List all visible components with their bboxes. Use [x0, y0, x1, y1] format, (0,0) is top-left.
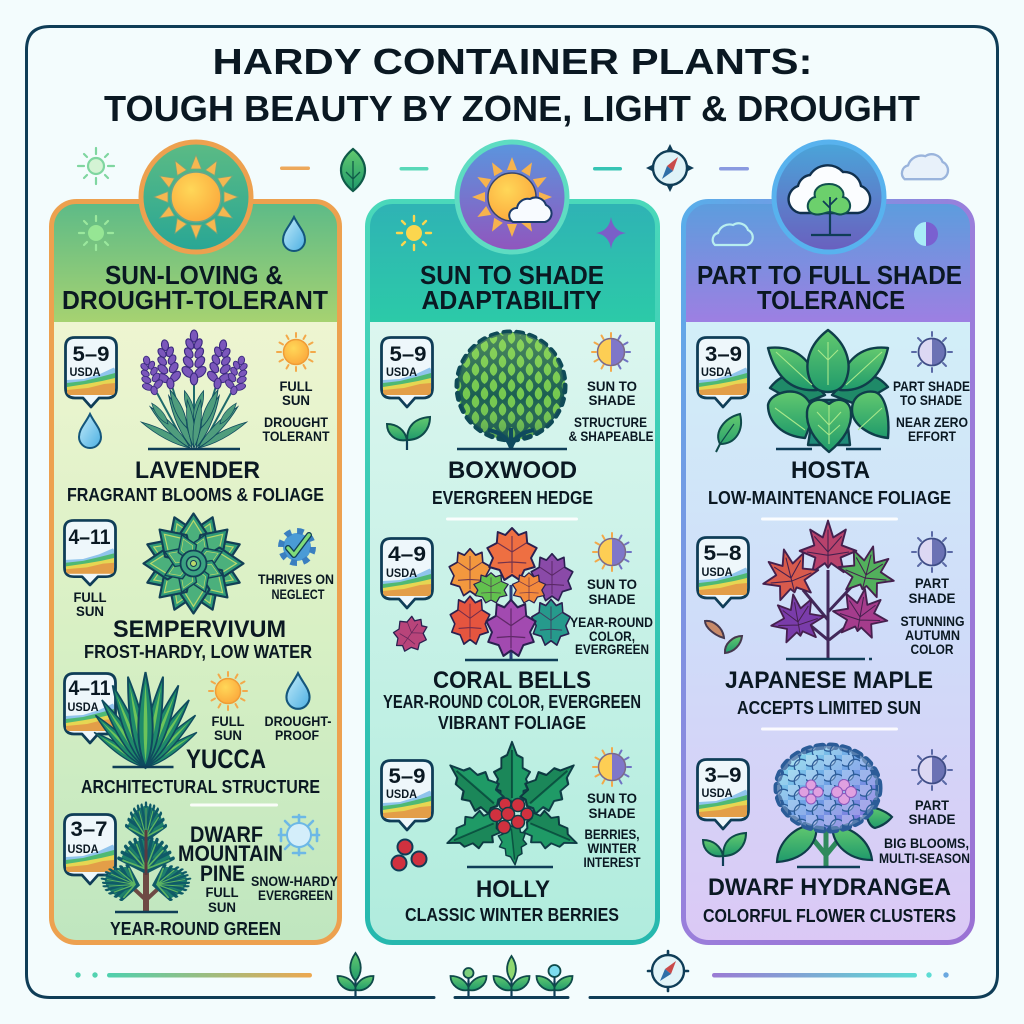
USDA badge 4-11 [64, 674, 116, 743]
labels: full sun: SUN [76, 603, 104, 619]
labels: drought-proof: DROUGHT- [264, 713, 332, 729]
icon: gear with check [281, 531, 313, 563]
USDA badge 3-9 [698, 760, 748, 829]
USDA badge 5-9 [382, 338, 432, 407]
icon: full sun [209, 672, 247, 710]
USDA badge 5-8 [698, 538, 748, 607]
plant: hydrangea [777, 746, 892, 867]
icon: full sun [277, 333, 315, 371]
labels [879, 797, 970, 866]
description: fragrant blooms: FRAGRANT BLOOMS & FOLIAGE [67, 485, 324, 505]
icon: two small leaves [705, 621, 742, 653]
plant: lavender [134, 330, 254, 451]
card: sempervivum [64, 511, 334, 662]
icon: compass [648, 951, 688, 991]
icon: snow sun [279, 815, 319, 855]
dash teal left [400, 167, 428, 170]
labels: full sun: FULL [206, 884, 239, 900]
name: dwarf mountain pine [178, 822, 283, 886]
USDA badge 5-9: 5–9 [388, 765, 426, 788]
USDA badge 5-8: 5–8 [704, 542, 742, 565]
USDA badge 4-11 [64, 520, 116, 585]
USDA badge 4-9: 4–9 [388, 543, 426, 566]
USDA badge 3-9: 3–9 [705, 343, 742, 366]
labels: STRUCTURE [574, 414, 647, 430]
labels: PART SHADE [893, 378, 970, 394]
labels: MULTI-SEASON [879, 850, 970, 866]
card: lavender [66, 330, 330, 505]
icon: berries [392, 840, 426, 870]
labels: YEAR-ROUND [570, 614, 653, 630]
description: classic winter berries: CLASSIC WINTER BERRIES [405, 905, 619, 925]
icon: outline sun [78, 148, 114, 184]
USDA badge 5-8: USDA [702, 565, 733, 579]
name: dwarf hydrangea: DWARF HYDRANGEA [708, 874, 951, 901]
icon: sun to shade [593, 748, 631, 786]
heading: PART TO FULL SHADE [697, 260, 962, 290]
labels: full sun [206, 884, 239, 915]
heading [62, 260, 328, 315]
name: dwarf mountain pine: PINE [200, 861, 245, 886]
icon: compass [646, 144, 694, 192]
plant: japanese maple [756, 521, 901, 659]
plant: boxwood [457, 332, 567, 449]
description: year-round color [383, 692, 641, 733]
card: coral bells [382, 528, 653, 733]
labels: AUTUMN [905, 627, 960, 643]
labels: BERRIES, [584, 826, 640, 842]
name: boxwood: BOXWOOD [448, 457, 577, 484]
name: holly: HOLLY [476, 876, 550, 903]
card: dwarf hydrangea [698, 746, 970, 926]
USDA badge 4-11: 4–11 [68, 526, 111, 549]
USDA badge 5-9 [66, 338, 116, 407]
card: hosta [698, 330, 970, 520]
USDA badge 3-7: 3–7 [70, 818, 108, 841]
icon: green sun [79, 216, 113, 250]
description: architectural structure: ARCHITECTURAL STRUCTURE [81, 777, 320, 797]
USDA badge 3-7: USDA [68, 842, 99, 856]
icon: sun to shade [592, 333, 630, 371]
card: yucca [64, 672, 332, 806]
labels: PART [915, 575, 949, 591]
heading [420, 260, 604, 315]
description: accepts limited sun: ACCEPTS LIMITED SUN [737, 698, 921, 718]
labels: COLOR, [589, 628, 635, 644]
description: low-maintenance foliage: LOW-MAINTENANCE FOLIAGE [708, 488, 951, 508]
labels: SHADE [588, 392, 636, 408]
labels: full sun, drought tolerant: DROUGHT [264, 414, 328, 430]
labels: WINTER [588, 840, 636, 856]
icon: red leaf [387, 610, 434, 658]
icon: part shade [912, 332, 952, 372]
card: dwarf mountain pine [64, 803, 339, 939]
icon: sprout [338, 953, 374, 997]
plant: coral bells [449, 528, 573, 660]
heading: ADAPTABILITY [422, 285, 602, 315]
USDA badge 4-11: USDA [68, 700, 99, 714]
USDA badge 5-9: 5–9 [390, 343, 426, 366]
USDA badge 4-9 [382, 538, 432, 608]
heading: DROUGHT-TOLERANT [62, 285, 328, 315]
footer decoration [75, 951, 949, 997]
icon: part shade [912, 750, 952, 790]
labels: snow-hardy evergreen [251, 873, 339, 903]
labels: TO SHADE [900, 392, 962, 408]
USDA badge 4-11: 4–11 [68, 677, 111, 700]
labels: SHADE [908, 590, 956, 606]
name: sempervivum: SEMPERVIVUM [113, 616, 286, 643]
labels: INTEREST [584, 854, 641, 870]
card: boxwood [382, 332, 654, 520]
title [104, 41, 920, 129]
title: HARDY CONTAINER PLANTS: [212, 41, 812, 82]
labels: full sun [212, 713, 245, 743]
labels: STUNNING [900, 613, 965, 629]
plant: pine [99, 803, 193, 912]
labels: thrives on neglect [258, 571, 334, 602]
labels: BIG BLOOMS, [884, 835, 969, 851]
labels [570, 576, 653, 657]
header circle: sun [141, 142, 251, 252]
labels: COLOR [910, 641, 954, 657]
labels: SHADE [588, 805, 636, 821]
header circle: tree and cloud [774, 142, 884, 252]
heading: SUN-LOVING & [105, 260, 283, 290]
labels: PART [915, 797, 949, 813]
icon: outline cloud [902, 154, 948, 179]
labels [893, 378, 970, 444]
description: frost-hardy: FROST-HARDY, LOW WATER [84, 642, 312, 662]
dash teal right [593, 167, 622, 170]
labels: NEAR ZERO [896, 414, 968, 430]
description: year-round color: VIBRANT FOLIAGE [438, 713, 586, 733]
labels: thrives on neglect: NEGLECT [272, 586, 325, 602]
icon: outline cloud [713, 223, 753, 245]
icon: drop [79, 414, 101, 448]
icon: sprout [703, 833, 746, 866]
labels [584, 790, 641, 870]
icon: leaf [341, 149, 365, 191]
labels [900, 575, 965, 657]
USDA badge 3-9: 3–9 [704, 764, 742, 787]
labels: full sun: SUN [208, 899, 236, 915]
labels: full sun, drought tolerant: FULL [280, 378, 313, 394]
USDA badge 3-9: USDA [702, 786, 733, 800]
description: year-round color: YEAR-ROUND COLOR, EVERGREEN [383, 692, 641, 712]
USDA badge 3-9: USDA [701, 365, 732, 379]
USDA badge 5-9: 5–9 [72, 343, 110, 366]
plant: holly [439, 742, 585, 867]
labels: full sun: FULL [74, 589, 107, 605]
dash orange [280, 166, 310, 170]
card: japanese maple [698, 521, 965, 730]
header circle: sun and cloud [457, 142, 567, 252]
icon: drop [286, 673, 310, 709]
icons: three seedlings [450, 956, 572, 997]
icon: part shade [912, 532, 952, 572]
labels: & SHAPEABLE [568, 428, 654, 444]
heading [697, 260, 962, 315]
labels: drought-proof [264, 713, 332, 743]
name: lavender: LAVENDER [135, 457, 260, 484]
USDA badge 4-9: USDA [386, 566, 417, 580]
USDA badge 5-9: USDA [70, 365, 101, 379]
icon: sun to shade [593, 533, 631, 571]
panel: part to full shade tolerance [681, 142, 975, 945]
plant: hosta [768, 330, 888, 452]
labels: EFFORT [908, 428, 956, 444]
labels: full sun, drought tolerant: SUN [282, 392, 310, 408]
name: yucca: YUCCA [186, 744, 266, 774]
labels: snow-hardy evergreen: EVERGREEN [258, 887, 333, 903]
labels: full sun: FULL [212, 713, 245, 729]
icon: header drop [283, 217, 305, 251]
labels: EVERGREEN [575, 641, 649, 657]
title: TOUGH BEAUTY BY ZONE, LIGHT & DROUGHT [104, 88, 920, 129]
name: japanese maple: JAPANESE MAPLE [725, 667, 933, 694]
labels [568, 378, 654, 444]
dash purple [719, 167, 749, 170]
name: hosta: HOSTA [791, 457, 870, 484]
left dots and gradient line [75, 972, 312, 978]
USDA badge 5-9: USDA [386, 365, 417, 379]
labels: full sun [74, 589, 107, 619]
description: evergreen hedge: EVERGREEN HEDGE [432, 488, 593, 508]
description: year-round green: YEAR-ROUND GREEN [110, 919, 281, 939]
heading: SUN TO SHADE [420, 260, 604, 290]
name: dwarf mountain pine: DWARF [190, 822, 263, 847]
labels: thrives on neglect: THRIVES ON [258, 571, 334, 587]
USDA badge 5-9 [382, 760, 432, 830]
icon: purple sparkle [596, 217, 626, 249]
labels: drought-proof: PROOF [275, 727, 319, 743]
icon: leaf [716, 414, 741, 452]
USDA badge 5-9: USDA [386, 787, 417, 801]
labels: full sun, drought tolerant [262, 378, 330, 444]
description: colorful flower clusters: COLORFUL FLOWER CLUSTERS [703, 906, 956, 926]
USDA badge 3-9 [698, 338, 748, 407]
labels: SUN TO [587, 790, 637, 806]
USDA badge 3-7 [64, 814, 116, 884]
icon: half circle [914, 222, 938, 246]
plant: yucca [92, 672, 199, 771]
labels: SUN TO [587, 576, 637, 592]
icon: yellow sun [397, 216, 431, 250]
panel: sun to shade adaptability [365, 142, 660, 945]
labels: SHADE [588, 591, 636, 607]
name: dwarf mountain pine: MOUNTAIN [178, 841, 283, 866]
card: holly [382, 742, 641, 925]
plant: sempervivum [141, 511, 246, 616]
labels: snow-hardy evergreen: SNOW-HARDY [251, 873, 339, 889]
right gradient line and dots [712, 972, 949, 978]
labels: SUN TO [587, 378, 637, 394]
labels: SHADE [908, 811, 956, 827]
labels: full sun, drought tolerant: TOLERANT [262, 428, 330, 444]
decorative icon row [78, 144, 948, 192]
labels: full sun: SUN [214, 727, 242, 743]
panel: sun-loving & drought-tolerant [49, 142, 342, 945]
name: coral bells: CORAL BELLS [433, 667, 591, 694]
icon: sprout [387, 417, 430, 450]
heading: TOLERANCE [757, 285, 905, 315]
